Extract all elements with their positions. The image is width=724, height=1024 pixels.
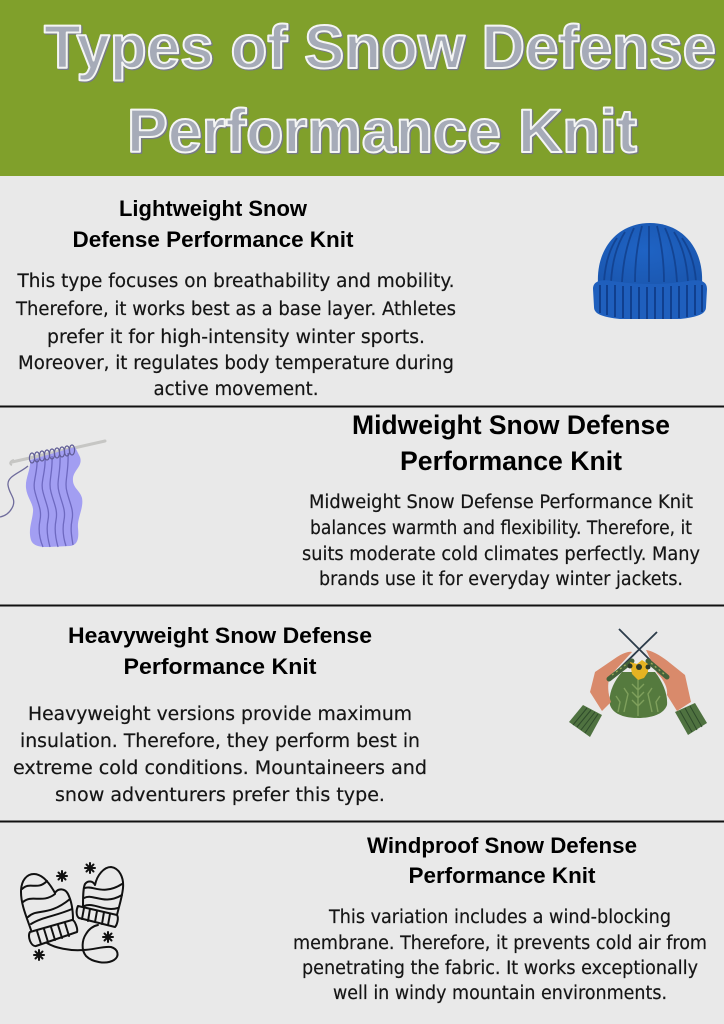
text: midweight: brands use it for everyday winter jackets. bbox=[319, 569, 683, 590]
panel: windproof bbox=[21, 833, 707, 1004]
panel: midweight bbox=[0, 410, 700, 590]
text: windproof: well in windy mountain environments. bbox=[333, 983, 667, 1004]
text: heavyweight bbox=[13, 704, 427, 806]
heading: midweight: Midweight Snow Defense bbox=[352, 410, 670, 440]
title: Types of Snow Defense bbox=[45, 14, 717, 82]
divider bbox=[0, 406, 724, 408]
text: windproof bbox=[293, 907, 707, 1004]
text: heavyweight: extreme cold conditions. Mountaineers and bbox=[13, 758, 427, 779]
heading: windproof: Windproof Snow Defense bbox=[367, 833, 637, 858]
text: midweight: Midweight Snow Defense Performance Knit bbox=[309, 492, 693, 513]
text: windproof: This variation includes a wind-blocking bbox=[328, 907, 671, 928]
text: heavyweight: insulation. Therefore, they perform best in bbox=[20, 731, 420, 752]
heading: midweight: Performance Knit bbox=[400, 446, 622, 476]
heading: heavyweight: Heavyweight Snow Defense bbox=[68, 623, 372, 648]
text: midweight bbox=[302, 492, 700, 590]
divider bbox=[0, 604, 724, 606]
title: Types of Snow Defense bbox=[44, 13, 716, 81]
text: midweight: balances warmth and flexibility. Therefore, it bbox=[310, 518, 692, 539]
text: heavyweight: snow adventurers prefer this type. bbox=[55, 785, 385, 806]
icon: snowflakes bbox=[34, 863, 113, 960]
icon: knitting swatch bbox=[0, 441, 105, 547]
heading: windproof: Performance Knit bbox=[408, 863, 596, 888]
text: windproof: membrane. Therefore, it prevents cold air from bbox=[293, 933, 707, 954]
heading: heavyweight: Performance Knit bbox=[124, 654, 317, 679]
heading: heavyweight bbox=[68, 623, 372, 679]
icon: mittens bbox=[21, 867, 123, 963]
text: lightweight: This type focuses on breathability and mobility. bbox=[17, 271, 455, 292]
title: Performance Knit bbox=[128, 98, 638, 166]
heading: lightweight bbox=[72, 196, 354, 252]
text: windproof: penetrating the fabric. It works exceptionally bbox=[302, 958, 698, 979]
heading: lightweight: Defense Performance Knit bbox=[72, 227, 354, 252]
panel: heavyweight bbox=[13, 623, 707, 806]
heading: midweight bbox=[352, 410, 670, 476]
text: heavyweight: Heavyweight versions provide maximum bbox=[28, 704, 412, 725]
divider bbox=[0, 820, 724, 822]
title bbox=[44, 13, 717, 166]
text: lightweight: Therefore, it works best as a base layer. Athletes bbox=[15, 299, 456, 320]
panel: lightweight bbox=[15, 196, 707, 400]
heading: lightweight: Lightweight Snow bbox=[119, 196, 307, 221]
heading: windproof bbox=[367, 833, 637, 888]
text: lightweight: active movement. bbox=[154, 379, 318, 400]
text: lightweight: Moreover, it regulates body temperature during bbox=[18, 353, 454, 374]
title banner bbox=[0, 0, 724, 176]
text: lightweight bbox=[15, 271, 456, 400]
title: Performance Knit bbox=[127, 97, 637, 165]
text: midweight: suits moderate cold climates perfectly. Many bbox=[302, 544, 700, 565]
icon: hands knitting bbox=[569, 629, 707, 737]
text: lightweight: prefer it for high-intensity winter sports. bbox=[47, 327, 425, 348]
icon: blue beanie bbox=[593, 223, 707, 319]
